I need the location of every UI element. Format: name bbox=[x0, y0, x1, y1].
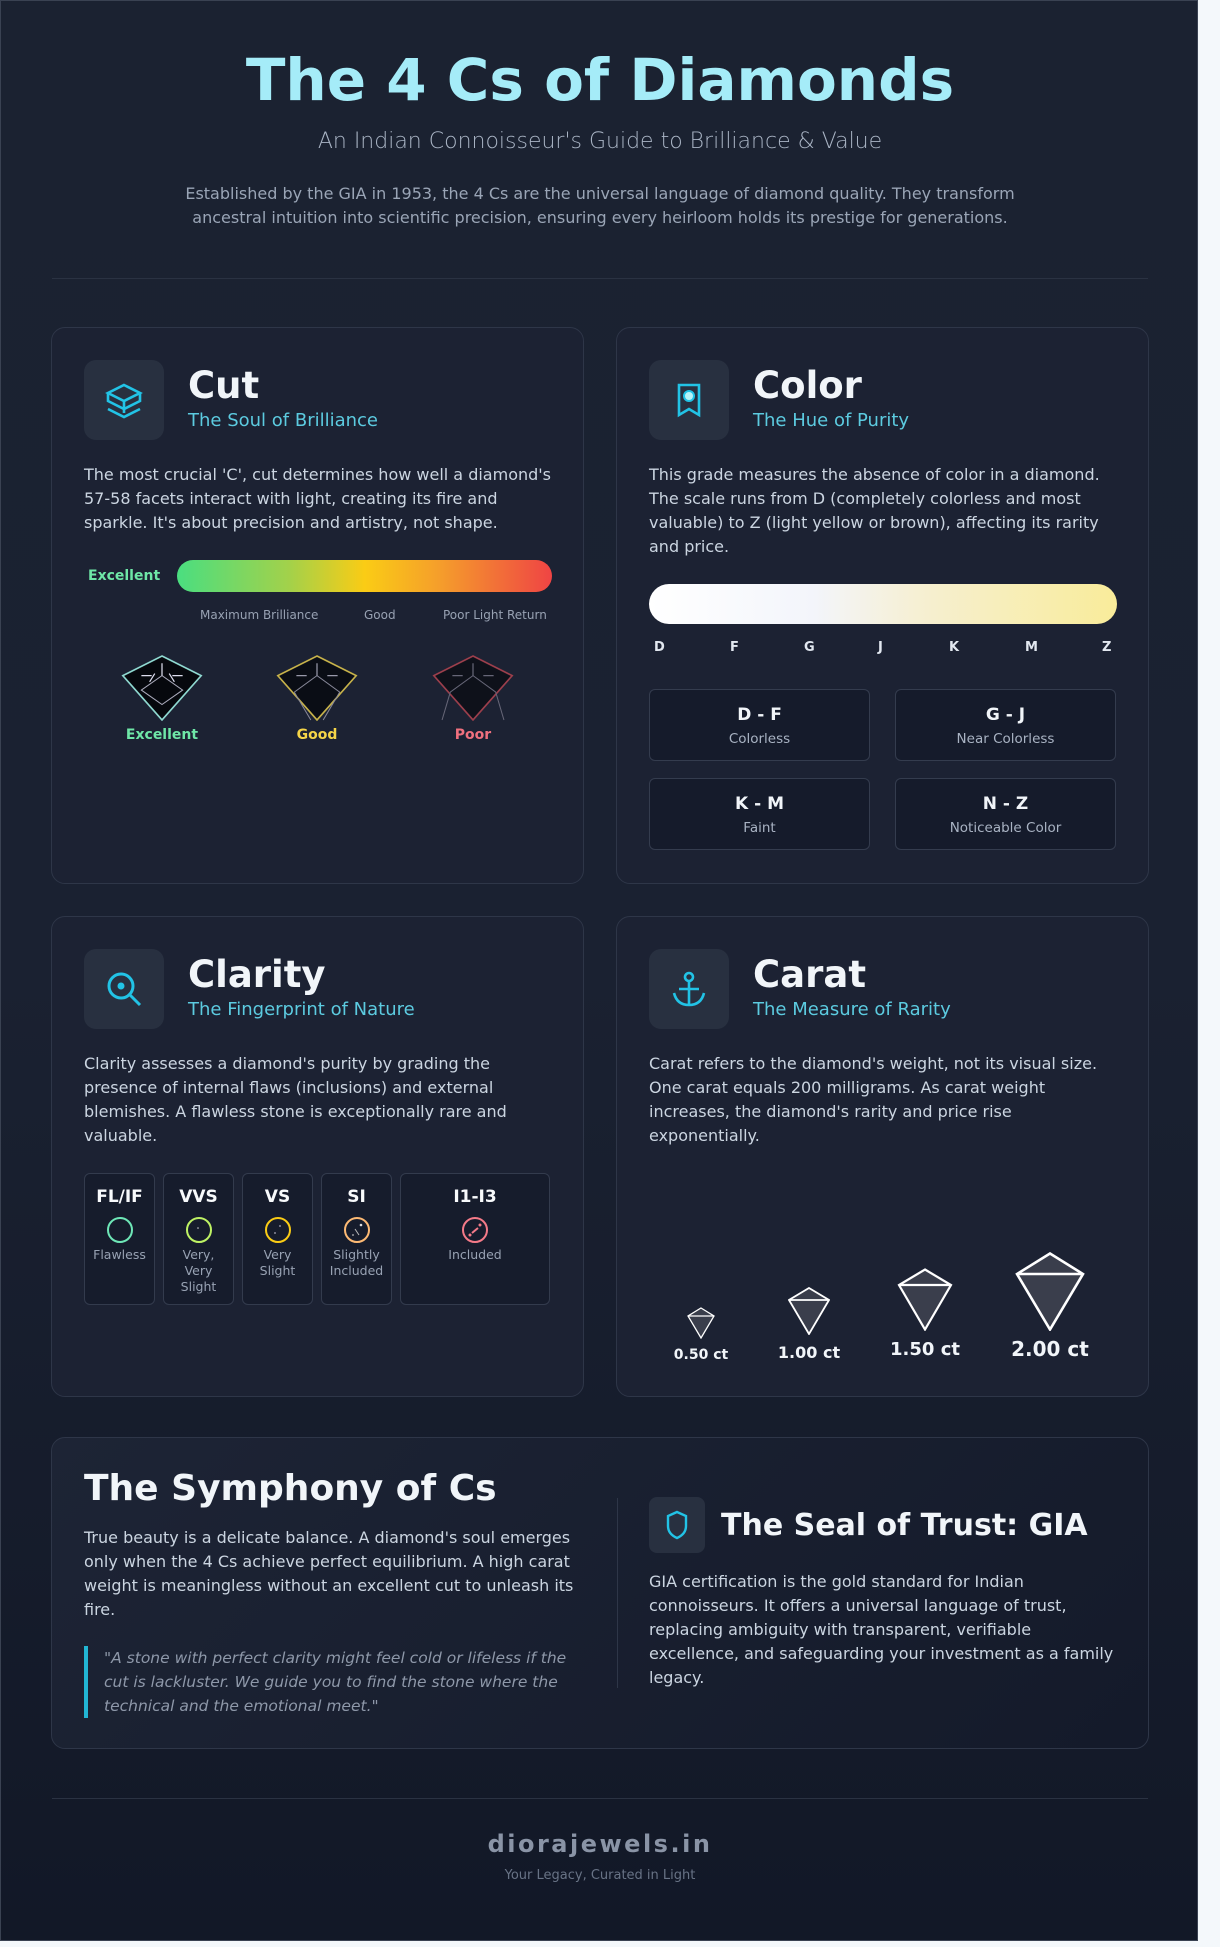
grade box G-J bbox=[895, 689, 1116, 761]
clarity grade FL/IF: FL/IF bbox=[96, 1187, 143, 1207]
color gradient scale: D bbox=[654, 640, 665, 655]
panel: clarity bbox=[51, 916, 584, 1397]
quote: "A stone with perfect clarity might feel cold or lifeless if the cut is lackluster. We guide you to find the stone where the technical and the emotional meet." bbox=[104, 1649, 566, 1715]
color gradient scale: K bbox=[949, 640, 959, 655]
clarity grade I1-I3: I1-I3 bbox=[453, 1187, 497, 1207]
color gradient scale: G bbox=[804, 640, 815, 655]
title: The 4 Cs of Diamonds bbox=[246, 46, 954, 114]
grade box D-F: Colorless bbox=[729, 731, 790, 747]
clarity grade I1-I3 bbox=[400, 1173, 550, 1305]
clarity grade VS bbox=[242, 1173, 313, 1305]
heading: GIA: The Seal of Trust: GIA bbox=[721, 1508, 1088, 1543]
carat 1.00: 1.00 ct bbox=[778, 1343, 840, 1362]
clarity grade VVS bbox=[163, 1173, 234, 1305]
carat 0.50 bbox=[674, 1307, 728, 1363]
color gradient scale bbox=[649, 584, 1117, 655]
gradient scale: Poor Light Return bbox=[443, 608, 547, 622]
icon: shield bbox=[649, 1497, 705, 1553]
clarity grade VVS: Very bbox=[185, 1263, 212, 1278]
color gradient scale: J bbox=[878, 640, 883, 655]
clarity grade VVS: VVS bbox=[179, 1187, 218, 1207]
gradient scale: Excellent bbox=[88, 568, 160, 584]
clarity grade SI bbox=[321, 1173, 392, 1305]
carat 0.50: 0.50 ct bbox=[674, 1347, 728, 1363]
panel: symphony and GIA bbox=[51, 1437, 1149, 1749]
description: Clarity assesses a diamond's purity by grading the presence of internal flaws (inclusions) and external blemishes. A flawless stone is exceptionally rare and valuable. bbox=[84, 1054, 507, 1145]
clarity grade VS: VS bbox=[265, 1187, 290, 1207]
grade box N-Z: Noticeable Color bbox=[950, 820, 1061, 836]
clarity grade I1-I3: Included bbox=[448, 1247, 502, 1262]
carat 2.00 bbox=[1011, 1252, 1089, 1361]
carat 1.50 bbox=[890, 1268, 960, 1360]
footer tagline: Your Legacy, Curated in Light bbox=[505, 1868, 695, 1883]
grade box D-F: D - F bbox=[737, 705, 782, 725]
diamond: good bbox=[276, 655, 358, 743]
clarity grade FL/IF bbox=[84, 1173, 155, 1305]
clarity grade SI: Included bbox=[330, 1263, 383, 1278]
subheading: The Fingerprint of Nature bbox=[188, 999, 415, 1020]
panel: cut bbox=[51, 327, 584, 884]
heading: cut: Cut bbox=[188, 364, 259, 407]
description: The most crucial 'C', cut determines how well a diamond's 57-58 facets interact with light, creating its fire and sparkle. It's about precision and artistry, not shape. bbox=[84, 465, 551, 532]
heading: clarity: Clarity bbox=[188, 953, 326, 996]
gradient scale: Maximum Brilliance bbox=[200, 608, 318, 622]
diamond: excellent: Excellent bbox=[126, 727, 198, 743]
subheading: The Hue of Purity bbox=[753, 410, 909, 431]
grade box G-J: Near Colorless bbox=[957, 731, 1054, 747]
carat 1.50: 1.50 ct bbox=[890, 1339, 960, 1360]
grade box K-M: K - M bbox=[735, 794, 784, 814]
GIA text: GIA certification is the gold standard for Indian connoisseurs. It offers a universal language of trust, replacing ambiguity with transparent, verifiable excellence, and safeguarding your investment as a family legacy. bbox=[649, 1572, 1113, 1687]
gradient scale: Good bbox=[364, 608, 396, 622]
icon: anchor bbox=[649, 949, 729, 1029]
grade box N-Z: N - Z bbox=[983, 794, 1028, 814]
icon: magnifier bbox=[84, 949, 164, 1029]
grade box G-J: G - J bbox=[986, 705, 1025, 725]
grade box K-M: Faint bbox=[743, 820, 776, 836]
intro text: Established by the GIA in 1953, the 4 Cs are the universal language of diamond quality. They transform ancestral intuition into scientific precision, ensuring every heirloom holds its prestige for generations. bbox=[185, 184, 1015, 227]
footer brand: diorajewels.in bbox=[488, 1830, 712, 1858]
color gradient scale: M bbox=[1025, 640, 1038, 655]
symphony text: True beauty is a delicate balance. A diamond's soul emerges only when the 4 Cs achieve perfect equilibrium. A high carat weight is meaningless without an excellent cut to unleash its fire. bbox=[84, 1528, 573, 1619]
description: This grade measures the absence of color in a diamond. The scale runs from D (completely colorless and most valuable) to Z (light yellow or brown), affecting its rarity and price. bbox=[649, 465, 1100, 556]
clarity grade VVS: Very, bbox=[183, 1247, 214, 1262]
clarity grade VVS: Slight bbox=[181, 1279, 216, 1294]
carat 2.00: 2.00 ct bbox=[1011, 1337, 1089, 1361]
color gradient scale: F bbox=[730, 640, 739, 655]
subheading: The Soul of Brilliance bbox=[188, 410, 378, 431]
grade box D-F bbox=[649, 689, 870, 761]
diamond: excellent bbox=[122, 655, 202, 743]
description: Carat refers to the diamond's weight, not its visual size. One carat equals 200 milligrams. As carat weight increases, the diamond's rarity and price rise exponentially. bbox=[649, 1054, 1097, 1145]
subheading: The Measure of Rarity bbox=[753, 999, 951, 1020]
clarity grade VS: Slight bbox=[260, 1263, 295, 1278]
diamond: poor: Poor bbox=[455, 727, 491, 743]
color gradient scale: Z bbox=[1102, 640, 1111, 655]
heading: color: Color bbox=[753, 364, 862, 407]
clarity grade SI: Slightly bbox=[333, 1247, 380, 1262]
clarity grade FL/IF: Flawless bbox=[93, 1247, 146, 1262]
subtitle: An Indian Connoisseur's Guide to Brilliance & Value bbox=[318, 129, 882, 154]
gradient scale bbox=[88, 560, 552, 622]
diamond: poor bbox=[432, 655, 514, 743]
heading: carat: Carat bbox=[753, 953, 866, 996]
grade box K-M bbox=[649, 778, 870, 850]
panel: carat bbox=[616, 916, 1149, 1397]
panel: color bbox=[616, 327, 1149, 884]
icon: cube bbox=[84, 360, 164, 440]
heading: symphony: The Symphony of Cs bbox=[84, 1468, 497, 1509]
clarity grade VS: Very bbox=[264, 1247, 291, 1262]
clarity grade SI: SI bbox=[347, 1187, 366, 1207]
grade box N-Z bbox=[895, 778, 1116, 850]
carat 1.00 bbox=[778, 1287, 840, 1362]
diamond: good: Good bbox=[297, 727, 337, 743]
icon: bookmark bbox=[649, 360, 729, 440]
